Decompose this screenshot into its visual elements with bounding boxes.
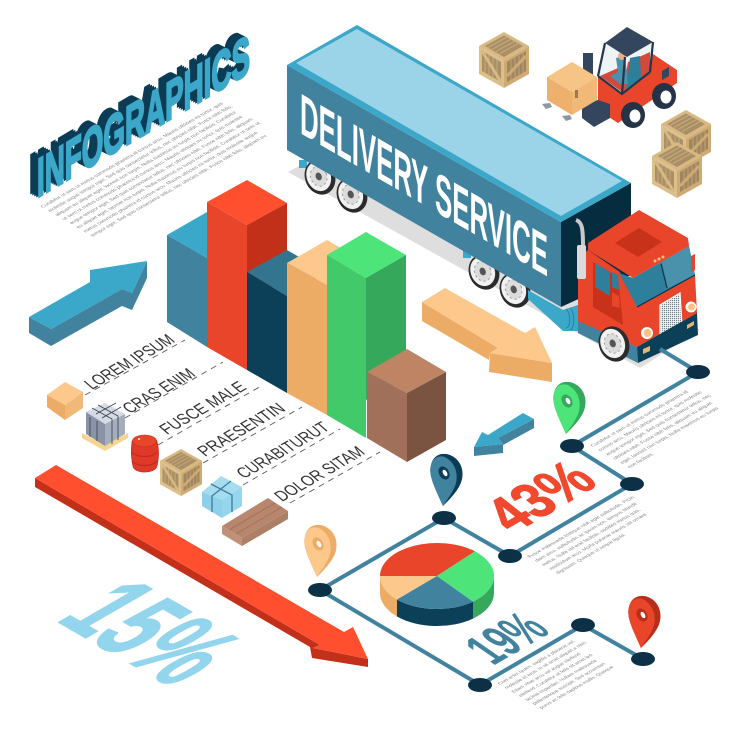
trailer chassis tank [528, 290, 578, 331]
cab roof [588, 210, 689, 278]
text block: route middle: vestibulum arcu. Morbi pulvinar mauris vel ornare [548, 513, 649, 571]
side mirror [691, 254, 695, 272]
engine block [582, 100, 610, 127]
icon: cardboard box [47, 382, 83, 420]
bar: teal [167, 212, 230, 347]
text block: route top [590, 385, 736, 469]
text block: intro paragraph: Curabitur ut sem ut metus commodo pharetra id cursus arcu. Mauris ultricies mi tortor, quis [40, 102, 226, 209]
text block: route bottom: molestie et eros. In sit amet aliquet a nisn. [503, 640, 589, 690]
roof hatch [615, 228, 662, 257]
bar: red [207, 180, 287, 370]
text block: route bottom: lacinia imperdiet. Nullam malesuada [524, 659, 599, 702]
icon: red barrel [131, 435, 158, 472]
text block: route middle [527, 495, 665, 575]
text block: route top: Curabitur ut sem ut metus commodo pharetra id [590, 390, 690, 448]
cab door [593, 262, 623, 325]
text block: route middle: dignissim. Quisque ut neque ligula. [555, 533, 628, 575]
icon: wooden crate [160, 449, 202, 496]
exhaust stack [576, 220, 586, 279]
arrow: small blue [474, 413, 534, 456]
icon: wood planks [222, 498, 288, 546]
big number: 19%: 19% [452, 604, 562, 673]
text block: route middle: metus. Nulla vel erat facilisis, sodales metus quis, [541, 508, 643, 567]
label: dolor sitam: DOLOR SITAM [270, 443, 369, 505]
text block: route bottom: eleifend. Curabitur at felis sit amet leo [517, 653, 595, 698]
arrow: blue, top left [29, 261, 147, 346]
trailer rear face [561, 183, 631, 307]
text block: route top: augue tempor eget. Sed quis consectetur tellus, nec [604, 393, 713, 457]
text block: route middle: Fusce malesuada tristique nibh eget sollicitudin. Proin [527, 495, 637, 559]
cab [576, 210, 698, 366]
text block: intro paragraph: molestie augue tempor eget. Sed quis consectetur tellus, nec ultricies nibh. Fusce nibh felis, [47, 105, 235, 213]
headlights [641, 302, 696, 339]
text block: route top: ultricies nibh. Fusce nibh felis, aliquam eu aliquet [612, 401, 715, 461]
pin: red [628, 596, 660, 648]
text block: route middle: diam arcu, sollicitudin ac ipsum non, tempus blandit [534, 502, 640, 563]
forks [542, 103, 552, 109]
vent [662, 67, 669, 80]
text block: intro paragraph: aliquam eu aliquet eget, laoreet non turpis. Nulla maximus eu turpis non facilisis. Curabitur [54, 110, 239, 217]
title: INFOGRAPHICS [29, 18, 250, 210]
icon: blue parcel [202, 476, 242, 518]
label: curabiturut: CURABITURUT [232, 419, 334, 482]
text block: route top: eget, laoreet non turpis. Nulla maximus eu turpis [619, 406, 721, 465]
wheels [621, 83, 676, 128]
text block: route top: cursus arcu. Mauris ultricies mi tortor, quis molestie [597, 390, 704, 452]
text block: route bottom: Cras enim quam, sagittis a placerat vel, [497, 639, 577, 686]
cab front [637, 275, 697, 347]
trailer side [287, 65, 561, 307]
text block: intro paragraph: augue tempor eget. Sed quis consectetur tellus, nec ultricies nibh. Fusce nibh felis, aliquam [68, 117, 255, 225]
text block: intro paragraph [40, 100, 277, 238]
big number: 43%: 43% [471, 450, 610, 542]
text block: intro paragraph: tempor eget. Sed quis consectetur tellus, nec ultricies nibh. Fusce nibh felis, aliquam eu [89, 134, 269, 238]
pin: tan [304, 525, 336, 577]
trailer roof [287, 25, 631, 222]
bar: navy [247, 250, 327, 393]
pie chart [380, 543, 494, 626]
route nodes [308, 365, 710, 692]
icon: pallet with wrapped goods [82, 403, 128, 451]
icon: forklift [542, 27, 677, 128]
text block: route top: non facilisis. [626, 452, 656, 469]
bar: green [327, 232, 406, 438]
pin: navy [430, 454, 462, 506]
bar chart [167, 180, 446, 462]
text block: route bottom: Etiam vitae arcu vel augue eleifend [510, 652, 583, 694]
text block: route bottom [497, 636, 624, 710]
radiator grille [660, 293, 682, 337]
truck shadow [288, 155, 700, 368]
text block: intro paragraph: eu aliquet eget, laoreet non turpis. Nulla maximus eu turpis non facilisis. Curabitur ut sem ut [75, 121, 263, 230]
arrow: long red [35, 465, 368, 667]
dashed leader lines [85, 340, 380, 503]
bar: brown [367, 349, 446, 462]
canopy [598, 27, 653, 94]
cabin [598, 42, 653, 94]
carried box [547, 62, 597, 115]
trailer rear wheels [299, 155, 536, 312]
bumper [578, 313, 698, 363]
text block: route bottom: pellentesque suscipit. Sed accumsan [531, 662, 608, 706]
windshield [619, 246, 695, 307]
truck [287, 25, 698, 366]
icon: floating crate [479, 32, 529, 88]
body [598, 50, 677, 123]
icon: stacked crate back [661, 110, 711, 166]
roof lights [654, 256, 664, 262]
mast [583, 53, 593, 77]
label: fusce male: FUSCE MALE [155, 378, 251, 438]
icon: stacked crate front [652, 142, 702, 198]
bar: tan [287, 240, 367, 415]
label: praesentin: PRAESENTIN [193, 400, 289, 460]
list labels [80, 331, 369, 505]
connector route [320, 349, 698, 685]
label: lorem ipsum: LOREM IPSUM [80, 331, 179, 393]
front wheel [593, 322, 635, 366]
text block: intro paragraph: metus commodo pharetra id cursus arcu. Mauris ultricies mi tortor, quis molestie augue [82, 131, 260, 234]
text block: intro paragraph: ut sem ut metus commodo pharetra id cursus arcu. Mauris ultricies mi tortor, quis molestie [61, 115, 245, 221]
label: cras enim: CRAS ENIM [118, 365, 200, 417]
pin: green [553, 382, 586, 434]
cab side [578, 250, 637, 347]
text block: route bottom: purus ac felis dapibus mollis. Quisque [538, 665, 616, 710]
arrow: tan [422, 288, 552, 382]
